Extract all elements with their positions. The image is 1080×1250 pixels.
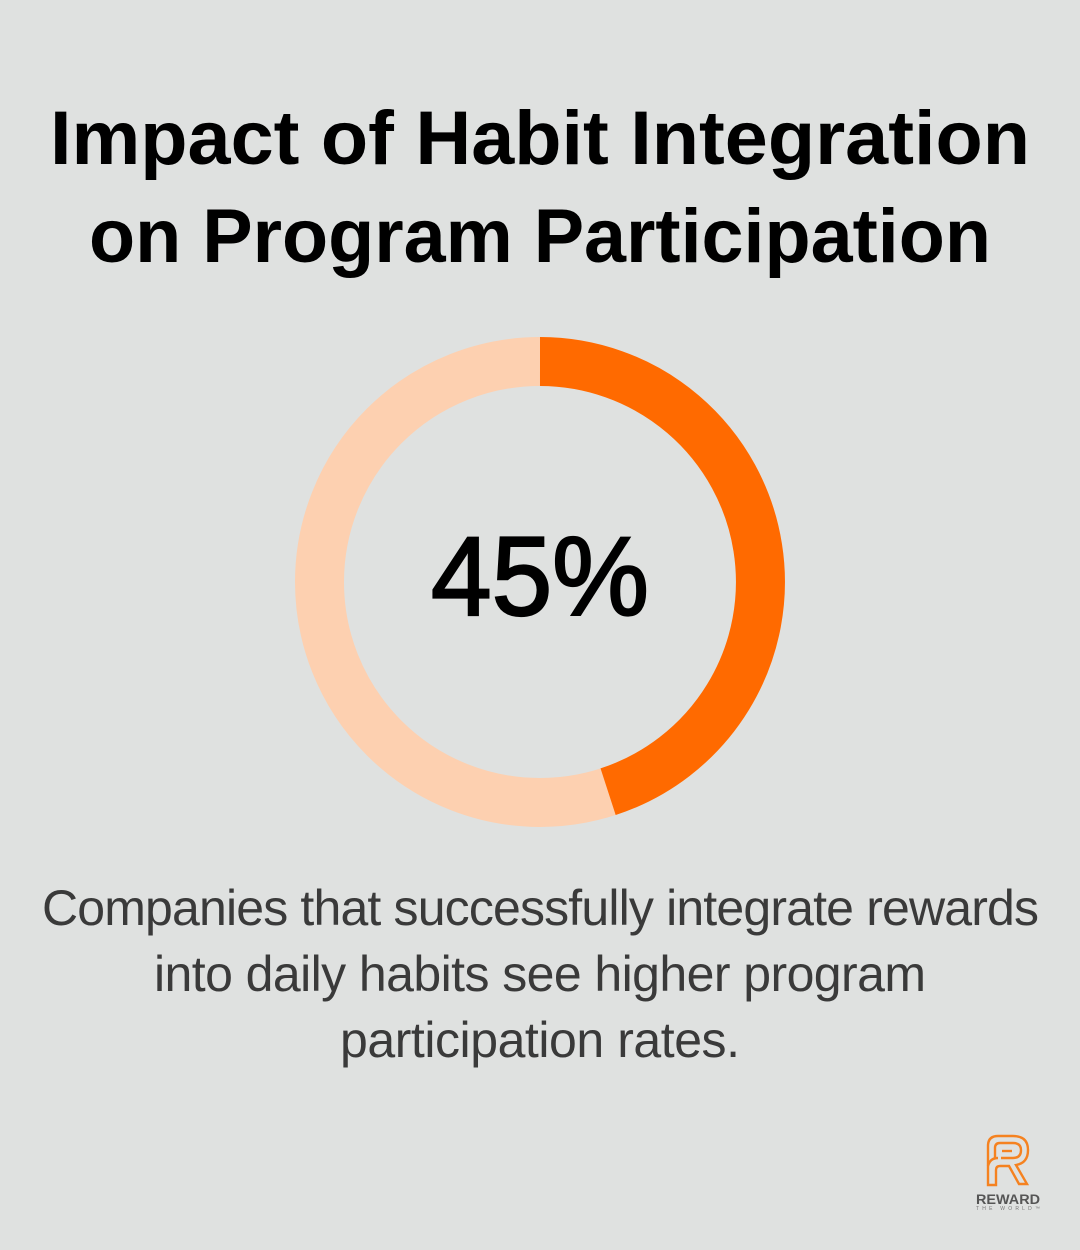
title: Impact of Habit Integration [50,96,1030,181]
logo tagline: THE WORLD™ [976,1206,1040,1212]
title: on Program Participation [89,194,991,279]
description text [42,880,1039,1068]
description text: Companies that successfully integrate rewards [42,880,1039,936]
description text: into daily habits see higher program [154,946,926,1002]
donut chart: 45% [320,362,760,802]
description text: participation rates. [340,1012,740,1068]
logo wordmark: REWARD [976,1192,1040,1207]
logo: Reward the World [976,1136,1040,1212]
donut value: 45% [431,514,649,639]
title [50,96,1030,279]
logo mark [988,1136,1028,1185]
